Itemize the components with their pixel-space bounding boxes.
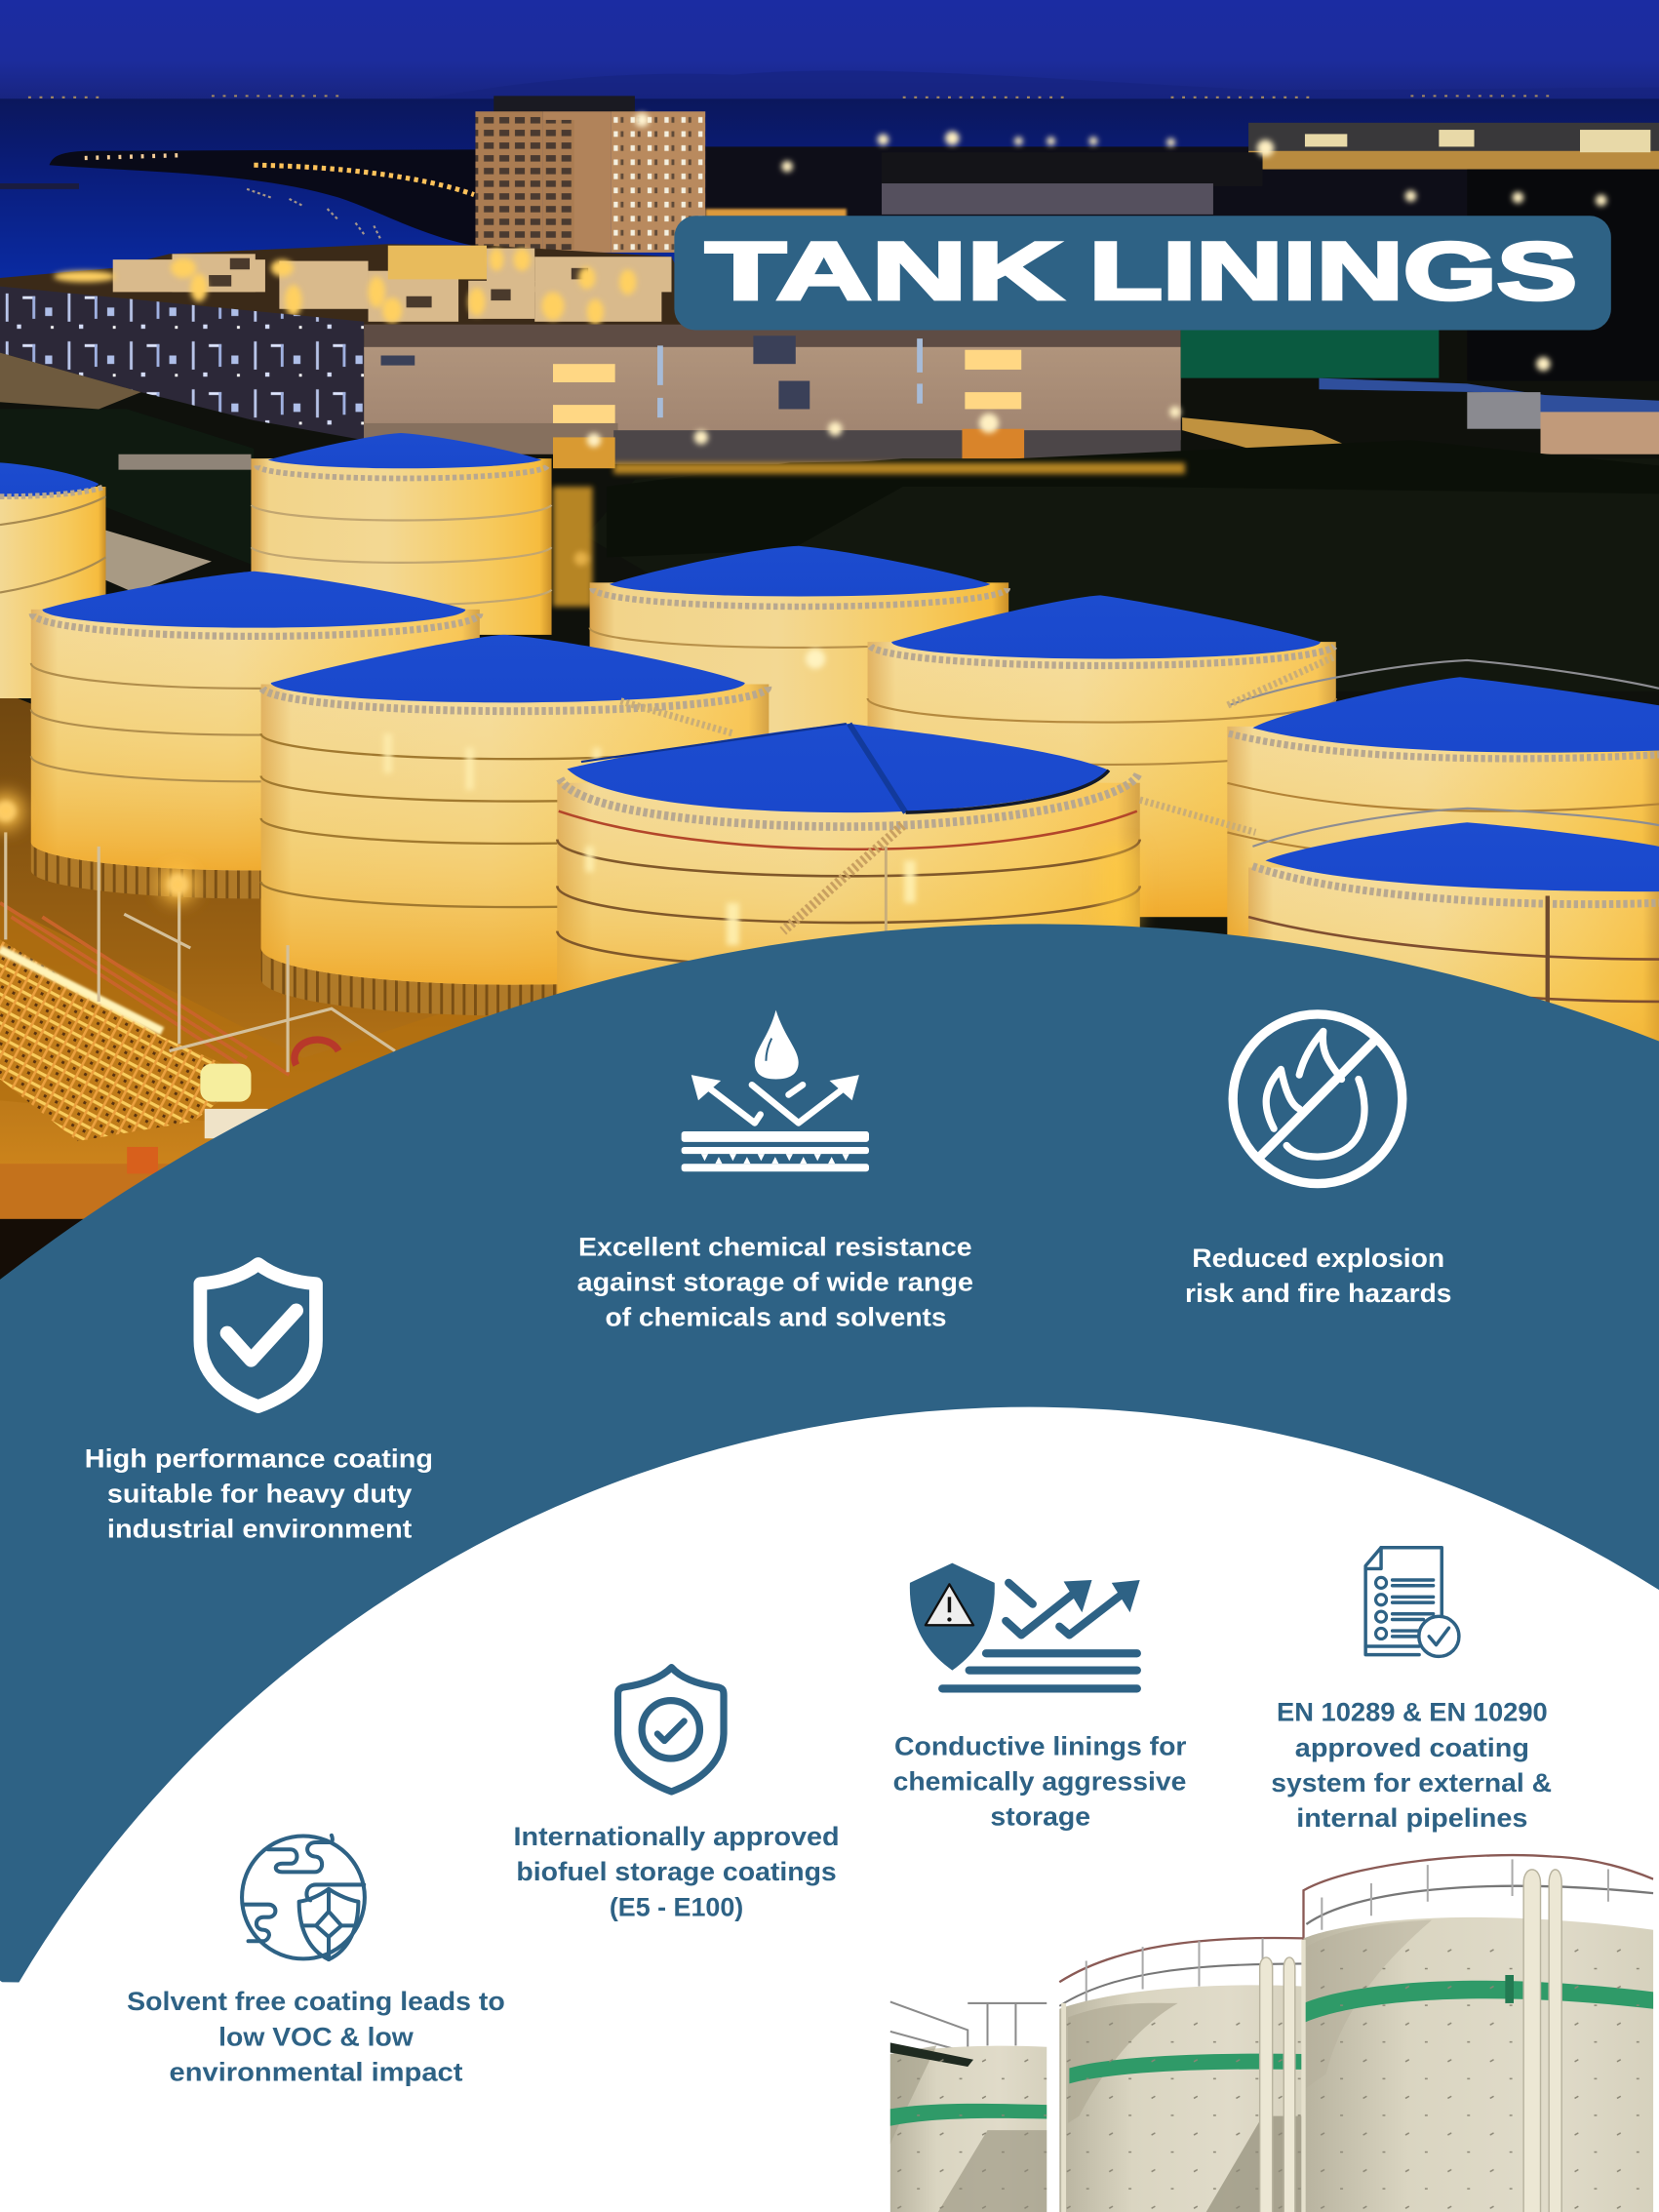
walkways between tanks (620, 657, 1333, 832)
green structure (1181, 330, 1439, 378)
tower block (475, 96, 705, 253)
tank: centre front (557, 724, 1140, 1015)
text: conductive linings (893, 1731, 1187, 1832)
text: conductive linings: chemically aggressive (893, 1767, 1186, 1797)
title banner: LININGS (1089, 225, 1577, 317)
icon: shield with check (200, 1264, 316, 1406)
waterfront low-rise buildings (0, 244, 705, 338)
text: biofuel coatings (513, 1822, 840, 1921)
text: solvent free: low VOC & low (218, 2022, 414, 2051)
panel: white lower area (0, 1407, 1659, 2212)
text: EN approvals: approved coating (1295, 1733, 1529, 1762)
pipework (0, 793, 395, 1173)
icon: globe with shield (242, 1836, 365, 1959)
panel: blue curved band (0, 924, 1659, 2003)
middle tank (1059, 1938, 1303, 2212)
tank: back left (251, 433, 552, 635)
icon: checklist document (1365, 1548, 1459, 1656)
left warehouse (0, 287, 364, 440)
icon: chemical drop on coating layers (682, 1010, 869, 1171)
text: high performance (85, 1443, 433, 1544)
text: biofuel coatings: biofuel storage coatings (516, 1857, 837, 1886)
text: EN approvals: internal pipelines (1296, 1803, 1527, 1833)
text: conductive linings: storage (990, 1802, 1090, 1832)
background photo: tank farm at night (0, 0, 1659, 1298)
text: EN approvals (1271, 1698, 1552, 1833)
tank: front right (1248, 809, 1659, 1086)
tank: centre back (868, 595, 1336, 917)
dark vegetation (585, 458, 1659, 691)
left tank (890, 2001, 1047, 2212)
text: high performance: industrial environment (107, 1515, 412, 1544)
photo: daytime storage tanks (890, 1855, 1653, 2212)
tank: centre left (261, 635, 769, 1015)
text: chemical resistance: of chemicals and solvents (606, 1303, 947, 1332)
text: chemical resistance (577, 1232, 973, 1332)
lights (574, 132, 1606, 566)
text: biofuel coatings: (E5 - E100) (610, 1892, 743, 1921)
text: chemical resistance: Excellent chemical resistance (578, 1232, 972, 1261)
text: EN approvals: EN 10289 & EN 10290 (1277, 1698, 1548, 1727)
text: explosion risk: risk and fire hazards (1185, 1279, 1451, 1308)
tank: back middle (590, 546, 1008, 748)
harbour pier (50, 149, 480, 247)
right tank (1303, 1855, 1653, 2212)
title banner: TANK (705, 225, 1062, 317)
lit ground (0, 691, 565, 1219)
icon: no fire (1233, 1014, 1402, 1184)
text: explosion risk (1185, 1244, 1451, 1308)
text: solvent free: Solvent free coating leads to (127, 1987, 505, 2016)
right side buildings (1319, 378, 1659, 417)
tank: right back (1227, 660, 1659, 960)
icon: warning shield with rising arrows (910, 1563, 1140, 1688)
text: solvent free: environmental impact (170, 2057, 462, 2086)
long beige warehouse (364, 325, 1181, 468)
text: high performance: suitable for heavy duty (107, 1479, 412, 1508)
tank: far left (0, 462, 105, 698)
icon: shield with circled check (618, 1668, 724, 1792)
text: EN approvals: system for external & (1271, 1768, 1552, 1797)
text: chemical resistance: against storage of wide range (577, 1267, 973, 1296)
text: biofuel coatings: Internationally approved (513, 1822, 840, 1851)
text: solvent free (127, 1987, 505, 2086)
airport and far side (705, 146, 1659, 237)
text: explosion risk: Reduced explosion (1192, 1244, 1444, 1273)
text: conductive linings: Conductive linings for (894, 1731, 1187, 1760)
text: high performance: High performance coating (85, 1443, 433, 1473)
tank: left front (31, 572, 480, 898)
title banner (674, 216, 1611, 330)
